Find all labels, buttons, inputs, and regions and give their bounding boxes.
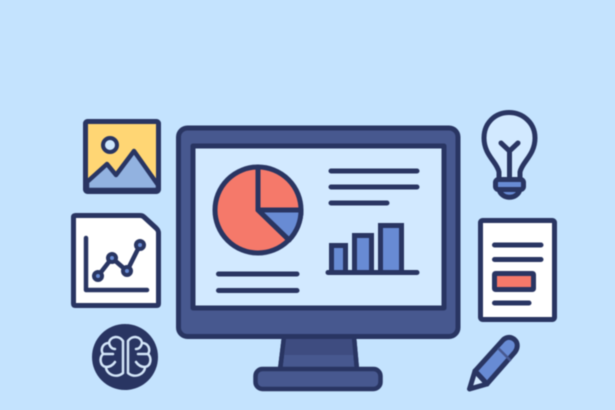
- icon: brain: [92, 324, 158, 390]
- icon: light bulb: [484, 112, 535, 197]
- monitor frame: [178, 128, 458, 336]
- icon: pencil: [470, 337, 517, 389]
- icon: line chart document: [74, 216, 158, 306]
- screen: [193, 146, 444, 308]
- monitor stand: [280, 337, 357, 370]
- monitor base: [256, 369, 380, 389]
- pie chart: [215, 167, 301, 253]
- icon: document: [480, 220, 554, 320]
- text lines left: [218, 274, 297, 290]
- text lines right: [331, 171, 417, 203]
- icon: picture: [86, 122, 158, 192]
- bar chart: [328, 226, 417, 272]
- monitor: [178, 128, 458, 389]
